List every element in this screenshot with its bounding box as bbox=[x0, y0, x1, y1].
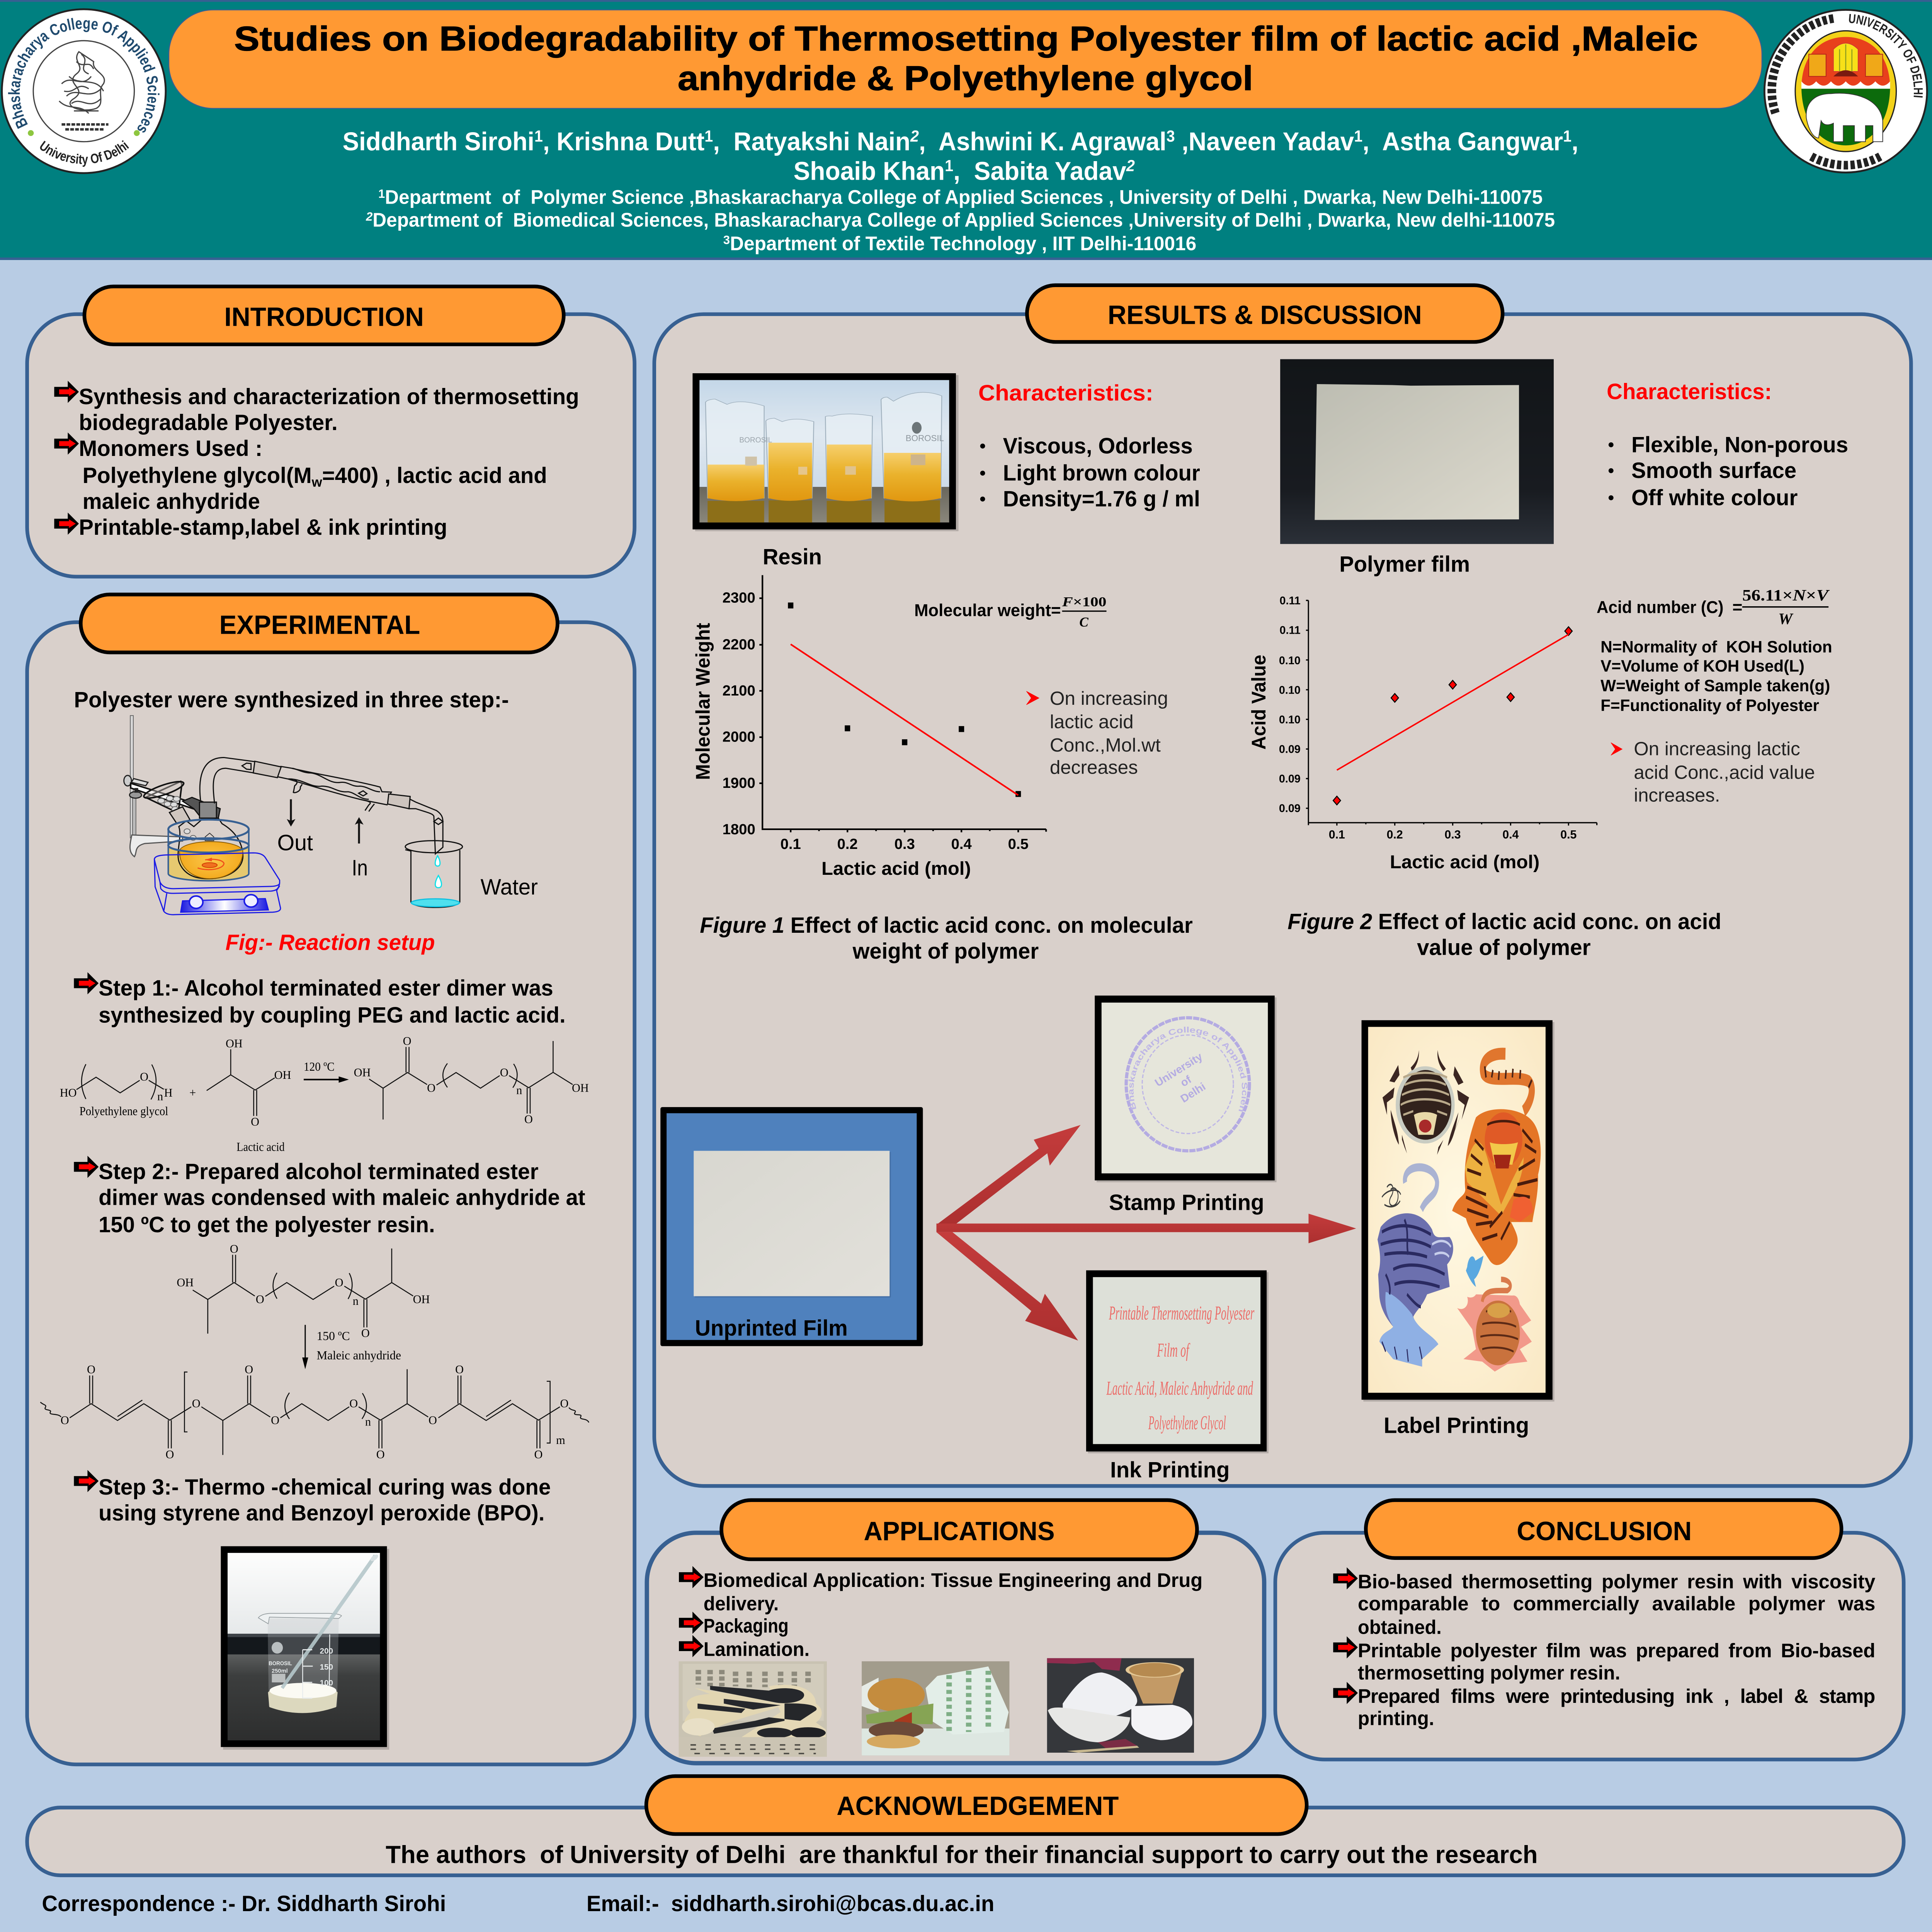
photo: cured resin in beaker bbox=[221, 1546, 389, 1750]
chemical scheme: step 2: Maleic anhydride bbox=[317, 1349, 401, 1362]
footer: correspondence: Correspondence :- Dr. Siddharth Sirohi bbox=[42, 1891, 446, 1916]
text block: introduction: =400) , lactic acid and bbox=[322, 463, 547, 488]
chemical scheme: step 2: O bbox=[376, 1448, 385, 1461]
data points bbox=[1333, 627, 1572, 805]
tick labels: 0.10 bbox=[1279, 684, 1301, 696]
note: acid value bbox=[1611, 738, 1815, 806]
chemical scheme: step 2 bbox=[41, 1242, 589, 1461]
chemical scheme: step 2: O bbox=[192, 1397, 201, 1410]
caption: figure 1 bbox=[700, 913, 1193, 964]
tick labels: 0.09 bbox=[1279, 773, 1301, 785]
photo: cured resin in beaker: 100 bbox=[320, 1679, 333, 1687]
tick labels: 0.09 bbox=[1279, 743, 1301, 755]
tick labels: 2200 bbox=[723, 636, 755, 653]
labels: out, in, water bbox=[277, 830, 538, 900]
step 3 text: using styrene and Benzoyl peroxide (BPO). bbox=[99, 1501, 544, 1526]
dark tiger head bbox=[1383, 1050, 1469, 1155]
affiliations: 2 bbox=[366, 209, 373, 223]
affiliations: 3 bbox=[723, 233, 730, 247]
label: ink printing: Ink Printing bbox=[1110, 1458, 1230, 1482]
text: acknowledgement: The authors of University of Delhi are thankful for their financial support to carry out the research bbox=[386, 1840, 1538, 1868]
chemical scheme: step 1: Polyethylene glycol bbox=[80, 1104, 168, 1118]
photo: resin beakers: BOROSIL bbox=[739, 436, 772, 444]
photo: cured resin in beaker: 150 bbox=[320, 1663, 333, 1672]
authors: Shoaib Khan bbox=[794, 157, 952, 186]
chemical scheme: step 1: OH bbox=[572, 1081, 589, 1094]
chemical scheme: step 2: n bbox=[365, 1415, 371, 1428]
text block: conclusion: comparable to commercially available polymer was bbox=[1358, 1593, 1875, 1615]
photo: ink printing: Film of bbox=[1157, 1340, 1190, 1361]
caption: figure 1: weight of polymer bbox=[852, 939, 1039, 964]
labels: out, in, water: Water bbox=[481, 875, 538, 900]
legend: acid number symbols bbox=[1600, 638, 1832, 715]
footer: correspondence bbox=[42, 1891, 994, 1916]
step 2 text: 150 ºC to get the polyester resin. bbox=[99, 1213, 435, 1237]
photo: burger in wrap bbox=[862, 1661, 1009, 1755]
chemical scheme: step 1: O bbox=[524, 1113, 533, 1126]
photo: ink printing: Printable Thermosetting Polyester bbox=[1109, 1303, 1254, 1324]
text block: conclusion: Bio-based thermosetting polymer resin with viscosity bbox=[1358, 1570, 1876, 1592]
tick labels bbox=[1279, 595, 1577, 841]
logo: University of Delhi: UNIVERSITY OF DELHI bbox=[1848, 12, 1925, 99]
label: label printing: Label Printing bbox=[1384, 1413, 1529, 1438]
chemical scheme: step 2: O bbox=[560, 1397, 568, 1410]
chemical scheme: step 2: O bbox=[230, 1242, 238, 1255]
photo: ink printing bbox=[1086, 1270, 1269, 1453]
step 1 text bbox=[74, 972, 566, 1028]
logo: Bhaskaracharya College: Bhaskaracharya College Of Applied Sciences bbox=[5, 14, 163, 137]
note: acid value: increases. bbox=[1634, 785, 1720, 806]
formula: molecular weight: Molecular weight= bbox=[914, 601, 1061, 620]
text block: introduction: Polyethylene glycol(M bbox=[83, 463, 315, 488]
step 1 text: synthesized by coupling PEG and lactic acid. bbox=[99, 1003, 566, 1028]
chemical scheme: step 1: HO bbox=[60, 1086, 77, 1099]
caption: figure 2 bbox=[1287, 909, 1721, 960]
caption: figure 2: value of polymer bbox=[1417, 935, 1591, 960]
header band bbox=[0, 0, 1932, 260]
text block: introduction: biodegradable Polyester. bbox=[79, 410, 338, 435]
chemical scheme: step 1: + bbox=[189, 1086, 196, 1099]
chemical scheme: step 1: 120 ºC bbox=[304, 1060, 335, 1073]
chemical scheme: step 1: n bbox=[516, 1084, 522, 1097]
text block: conclusion: Prepared films were printedusing ink , label & stamp bbox=[1358, 1685, 1875, 1707]
tick labels: 0.10 bbox=[1279, 714, 1301, 726]
heading: experimental: EXPERIMENTAL bbox=[219, 610, 420, 640]
logo: Bhaskaracharya College: University Of Delhi bbox=[37, 138, 132, 167]
chemical scheme: step 2: m bbox=[556, 1434, 565, 1447]
chemical scheme: step 2: O bbox=[61, 1414, 69, 1427]
step 2 text: dimer was condensed with maleic anhydride at bbox=[99, 1185, 585, 1210]
labels: out, in, water: Out bbox=[277, 830, 313, 855]
axis titles: Lactic acid (mol) bbox=[1390, 852, 1539, 872]
authors: Siddharth Sirohi bbox=[342, 127, 544, 156]
note: molecular weight: lactic acid bbox=[1050, 711, 1134, 733]
heading: conclusion: CONCLUSION bbox=[1517, 1516, 1692, 1546]
characteristics: polymer film bbox=[1607, 379, 1848, 510]
axes bbox=[759, 575, 1046, 832]
note: molecular weight: decreases bbox=[1050, 757, 1138, 778]
heading: conclusion bbox=[1366, 1500, 1842, 1558]
photo: label printing bbox=[1362, 1020, 1554, 1401]
text block: conclusion: printing. bbox=[1358, 1707, 1434, 1729]
panel: experimental bbox=[27, 595, 634, 1764]
tick labels: 0.11 bbox=[1279, 595, 1301, 607]
formula: acid number: 56.11× N × V bbox=[1742, 586, 1830, 604]
authors: 1 bbox=[1354, 127, 1362, 145]
characteristics: polymer film: Smooth surface bbox=[1631, 458, 1796, 483]
authors: 2 bbox=[910, 127, 919, 145]
arrow: to ink printing bbox=[936, 1232, 1078, 1340]
photo: stamp printing: Delhi bbox=[1179, 1080, 1208, 1105]
text block: conclusion bbox=[1333, 1567, 1876, 1729]
authors bbox=[342, 127, 1578, 186]
trend line bbox=[791, 644, 1018, 795]
knot bbox=[1382, 1184, 1401, 1207]
caption: figure 1: Figure 1 Effect of lactic acid conc. on molecular bbox=[700, 913, 1193, 938]
characteristics: polymer film: Characteristics: bbox=[1607, 379, 1772, 404]
authors: 1 bbox=[704, 127, 713, 145]
heading: acknowledgement: ACKNOWLEDGEMENT bbox=[837, 1791, 1119, 1821]
heading: acknowledgement bbox=[646, 1776, 1307, 1834]
chemical scheme: step 2: O bbox=[349, 1397, 358, 1410]
panel: applications bbox=[647, 1500, 1264, 1763]
tick labels: 0.10 bbox=[1279, 655, 1301, 667]
title pill: Studies on Biodegradability of Thermosetting Polyester film of lactic acid ,Maleic bbox=[234, 19, 1698, 58]
authors: , Astha Gangwar bbox=[1362, 127, 1563, 156]
text block: introduction: Printable-stamp,label & ink printing bbox=[79, 515, 447, 540]
chemical scheme: step 1: O bbox=[427, 1081, 435, 1094]
legend: acid number symbols: F=Functionality of Polyester bbox=[1600, 696, 1819, 715]
heading: results bbox=[1027, 285, 1503, 342]
axis titles: Molecular Weight bbox=[692, 623, 714, 780]
heading: results: RESULTS & DISCUSSION bbox=[1108, 300, 1422, 330]
beaker 4 bbox=[884, 500, 940, 522]
axis titles: Acid Value bbox=[1248, 655, 1270, 750]
label: stamp printing: Stamp Printing bbox=[1109, 1190, 1264, 1215]
formula: molecular weight bbox=[914, 594, 1107, 629]
affiliations: Department of Textile Technology , IIT Delhi-110016 bbox=[730, 232, 1196, 254]
chemical scheme: step 2: O bbox=[429, 1414, 437, 1427]
text block: introduction: Monomers Used : bbox=[79, 436, 262, 461]
panel: introduction bbox=[27, 286, 634, 577]
tick labels: 0.11 bbox=[1279, 624, 1301, 637]
text block: applications: Biomedical Application: Tissue Engineering and Drug bbox=[704, 1569, 1202, 1591]
affiliations: Department of Biomedical Sciences, Bhaskaracharya College of Applied Sciences ,University of Delhi , Dwarka, New delhi-110075 bbox=[372, 209, 1555, 231]
water bath bbox=[168, 845, 249, 881]
receiving beaker bbox=[405, 841, 463, 908]
text block: introduction: Synthesis and characterization of thermosetting bbox=[79, 384, 579, 409]
photo: resin beakers: BOROSIL bbox=[906, 434, 944, 443]
note: acid value: On increasing lactic bbox=[1634, 738, 1800, 760]
photo: unprinted film: Unprinted Film bbox=[695, 1316, 848, 1341]
text block: applications bbox=[679, 1566, 1202, 1660]
chemical scheme: step 2: O bbox=[335, 1276, 343, 1289]
beaker 2 bbox=[769, 500, 812, 522]
tick labels: 2000 bbox=[723, 729, 755, 745]
authors: 1 bbox=[945, 156, 953, 175]
text block: applications: Packaging bbox=[704, 1615, 789, 1637]
authors: , Ratyakshi Nain bbox=[713, 127, 910, 156]
text block: introduction: w bbox=[311, 475, 322, 490]
photo: resin beakers bbox=[692, 373, 959, 531]
panel: conclusion bbox=[1275, 1500, 1904, 1760]
authors: , bbox=[1571, 127, 1578, 156]
heading: applications bbox=[721, 1500, 1197, 1559]
text block: conclusion: obtained. bbox=[1358, 1616, 1442, 1638]
chemical scheme: step 1: OH bbox=[226, 1037, 243, 1050]
panel: results and discussion bbox=[0, 0, 1911, 1486]
tick labels: 0.4 bbox=[951, 836, 972, 852]
chemical scheme: step 2: O bbox=[165, 1448, 174, 1461]
heading: introduction bbox=[84, 286, 564, 344]
flask bbox=[178, 818, 243, 879]
chemical scheme: step 2: 150 ºC bbox=[317, 1329, 350, 1343]
photo: stamp printing: Bhaskaracharya College of Applied Sciences bbox=[0, 0, 1249, 1113]
small fire tiger bbox=[1457, 1279, 1532, 1372]
formula: acid number: = bbox=[1732, 598, 1742, 617]
tick labels: 1900 bbox=[723, 775, 755, 791]
note: molecular weight: On increasing bbox=[1050, 688, 1168, 709]
label: resin: Resin bbox=[763, 544, 822, 569]
label: polymer film: Polymer film bbox=[1339, 552, 1470, 577]
authors: 3 bbox=[1167, 127, 1175, 145]
heading: experimental bbox=[81, 595, 558, 652]
heading: introduction: INTRODUCTION bbox=[224, 302, 424, 332]
photo: cured resin in beaker: BOROSIL bbox=[269, 1661, 292, 1667]
authors: , Sabita Yadav bbox=[953, 157, 1126, 186]
arrow: to stamp printing bbox=[936, 1125, 1081, 1225]
characteristics: resin: Density=1.76 g / ml bbox=[1003, 487, 1200, 512]
tick labels: 0.3 bbox=[1445, 828, 1461, 841]
note: molecular weight: Conc.,Mol.wt bbox=[1050, 735, 1161, 756]
tick labels: 0.3 bbox=[895, 836, 915, 852]
tick labels: 2100 bbox=[723, 682, 755, 699]
tick labels: 1800 bbox=[723, 821, 755, 838]
axis titles: Lactic acid (mol) bbox=[821, 859, 971, 879]
diagram: reaction setup bbox=[124, 716, 538, 915]
axis titles bbox=[692, 623, 971, 879]
photo: biodegradable cutlery bbox=[679, 1661, 827, 1757]
formula: acid number: W bbox=[1778, 610, 1794, 628]
photo: unprinted film bbox=[660, 1107, 923, 1346]
axes bbox=[1306, 600, 1597, 825]
characteristics: resin: Viscous, Odorless bbox=[1003, 434, 1193, 458]
tick labels bbox=[723, 589, 1029, 852]
characteristics: polymer film: Off white colour bbox=[1631, 485, 1798, 510]
affiliations: 1 bbox=[378, 187, 385, 201]
step 3 text: Step 3:- Thermo -chemical curing was done bbox=[99, 1475, 551, 1500]
caption: figure 2: Figure 2 Effect of lactic acid conc. on acid bbox=[1287, 909, 1721, 934]
photo: white bowls and cup bbox=[1047, 1658, 1194, 1753]
authors: , Krishna Dutt bbox=[543, 127, 704, 156]
chemical scheme: step 2: OH bbox=[177, 1276, 194, 1289]
chemical scheme: step 2: n bbox=[353, 1294, 359, 1308]
photo: polymer film bbox=[1280, 359, 1554, 544]
text: intro line: Polyester were synthesized in three step:- bbox=[74, 687, 509, 712]
photo: ink printing: Polyethylene Glycol bbox=[1148, 1412, 1226, 1434]
arrow: to label printing bbox=[936, 1214, 1356, 1243]
title pill: anhydride & Polyethylene glycol bbox=[678, 59, 1253, 97]
axis titles bbox=[1248, 655, 1539, 872]
tick labels: 0.1 bbox=[1329, 828, 1345, 841]
note: acid value: acid Conc.,acid value bbox=[1634, 762, 1815, 783]
chemical scheme: step 1: O bbox=[251, 1115, 259, 1128]
text block: applications: delivery. bbox=[704, 1593, 779, 1615]
chemical scheme: step 1: Lactic acid bbox=[236, 1140, 285, 1153]
text block: conclusion: thermosetting polymer resin. bbox=[1358, 1662, 1620, 1684]
footer: correspondence: Email:- siddharth.sirohi@bcas.du.ac.in bbox=[587, 1891, 994, 1916]
stand and clamp bbox=[130, 716, 133, 838]
logo: University of Delhi bbox=[1764, 10, 1927, 172]
funnel bbox=[146, 781, 182, 811]
chemical scheme: step 1: O bbox=[403, 1034, 412, 1048]
chemical scheme: step 1: O bbox=[140, 1070, 148, 1083]
title pill bbox=[169, 10, 1762, 109]
chemical scheme: step 2: OH bbox=[413, 1293, 430, 1306]
legend: acid number symbols: W=Weight of Sample taken(g) bbox=[1600, 677, 1830, 695]
butterfly bbox=[1466, 1256, 1483, 1287]
data points bbox=[788, 602, 1021, 797]
hot plate bbox=[154, 853, 281, 915]
tick labels: 0.4 bbox=[1502, 828, 1519, 841]
chart: acid value vs lactic acid bbox=[1248, 595, 1597, 872]
tick labels: 0.1 bbox=[781, 836, 801, 852]
characteristics: polymer film: Flexible, Non-porous bbox=[1631, 432, 1848, 457]
authors: 2 bbox=[1126, 156, 1135, 175]
figure caption: reaction setup: Fig:- Reaction setup bbox=[226, 930, 435, 955]
beaker 1 bbox=[707, 501, 764, 522]
note: molecular weight bbox=[1026, 688, 1168, 778]
authors: 1 bbox=[534, 127, 543, 145]
chemical scheme: step 1: OH bbox=[274, 1068, 291, 1082]
heading: applications: APPLICATIONS bbox=[864, 1516, 1055, 1546]
step 2 text: Step 2:- Prepared alcohol terminated ester bbox=[99, 1160, 538, 1184]
chemical scheme: step 1: O bbox=[500, 1066, 509, 1079]
trend line bbox=[1337, 634, 1568, 770]
chemical scheme: step 2: O bbox=[245, 1363, 253, 1376]
chemical scheme: step 2: O bbox=[271, 1414, 279, 1427]
formula: molecular weight: C bbox=[1079, 614, 1088, 629]
tick labels: 0.09 bbox=[1279, 802, 1301, 815]
chemical scheme: step 2: O bbox=[87, 1363, 95, 1376]
beaker 3 bbox=[827, 501, 872, 522]
panel: acknowledgement bbox=[27, 1776, 1904, 1875]
formula: molecular weight: F ×100 bbox=[1062, 594, 1107, 609]
text block: applications: Lamination. bbox=[704, 1638, 810, 1660]
affiliations bbox=[366, 186, 1555, 254]
chemical scheme: step 1: H bbox=[164, 1086, 173, 1099]
photo: stamp printing: University bbox=[1153, 1050, 1205, 1089]
text block: conclusion: Printable polyester film was prepared from Bio-based bbox=[1358, 1639, 1875, 1662]
formula: acid number: Acid number (C) bbox=[1597, 598, 1723, 617]
step 2 text bbox=[74, 1156, 585, 1237]
chemical scheme: step 2: O bbox=[534, 1448, 543, 1461]
characteristics: resin bbox=[978, 381, 1200, 512]
chemical scheme: step 1 bbox=[60, 1034, 589, 1153]
tick labels: 2300 bbox=[723, 589, 755, 606]
characteristics: resin: Characteristics: bbox=[978, 381, 1153, 405]
condenser bbox=[200, 757, 443, 854]
tubing arrows bbox=[290, 799, 292, 822]
tick labels: 0.5 bbox=[1560, 828, 1577, 841]
blue tiger bbox=[1378, 1167, 1453, 1367]
formula: acid number bbox=[1597, 586, 1830, 628]
tick labels: 0.2 bbox=[1387, 828, 1403, 841]
chemical scheme: step 2: O bbox=[455, 1363, 464, 1376]
photo: stamp printing: of bbox=[1178, 1073, 1194, 1089]
authors: ,Naveen Yadav bbox=[1175, 127, 1354, 156]
text block: introduction: maleic anhydride bbox=[83, 489, 260, 514]
legend: acid number symbols: N=Normality of KOH Solution bbox=[1600, 638, 1832, 656]
chemical scheme: step 2: O bbox=[256, 1293, 264, 1306]
chemical scheme: step 2: O bbox=[361, 1327, 370, 1340]
chart: molecular weight vs lactic acid bbox=[692, 575, 1046, 879]
step 1 text: Step 1:- Alcohol terminated ester dimer was bbox=[99, 976, 553, 1001]
tick labels: 0.5 bbox=[1008, 836, 1029, 852]
labels: out, in, water: In bbox=[352, 856, 368, 881]
authors: , Ashwini K. Agrawal bbox=[919, 127, 1167, 156]
legend: acid number symbols: V=Volume of KOH Used(L) bbox=[1600, 657, 1804, 675]
chemical scheme: step 1: n bbox=[157, 1090, 163, 1103]
characteristics: resin: Light brown colour bbox=[1003, 461, 1200, 486]
photo: ink printing: Lactic Acid, Maleic Anhydride and bbox=[1106, 1378, 1253, 1400]
affiliations: Department of Polymer Science ,Bhaskaracharya College of Applied Sciences , University of Delhi , Dwarka, New Delhi-110075 bbox=[385, 186, 1543, 208]
photo: cured resin in beaker: 200 bbox=[320, 1646, 333, 1655]
step 3 text bbox=[74, 1470, 551, 1526]
text block: introduction bbox=[54, 381, 579, 540]
tick labels: 0.2 bbox=[837, 836, 858, 852]
bath rims bbox=[168, 820, 249, 839]
photo: cured resin in beaker: 250ml bbox=[272, 1668, 288, 1674]
chemical scheme: step 1: OH bbox=[354, 1066, 371, 1079]
orange tiger bbox=[1452, 1054, 1541, 1265]
authors: 1 bbox=[1563, 127, 1571, 145]
